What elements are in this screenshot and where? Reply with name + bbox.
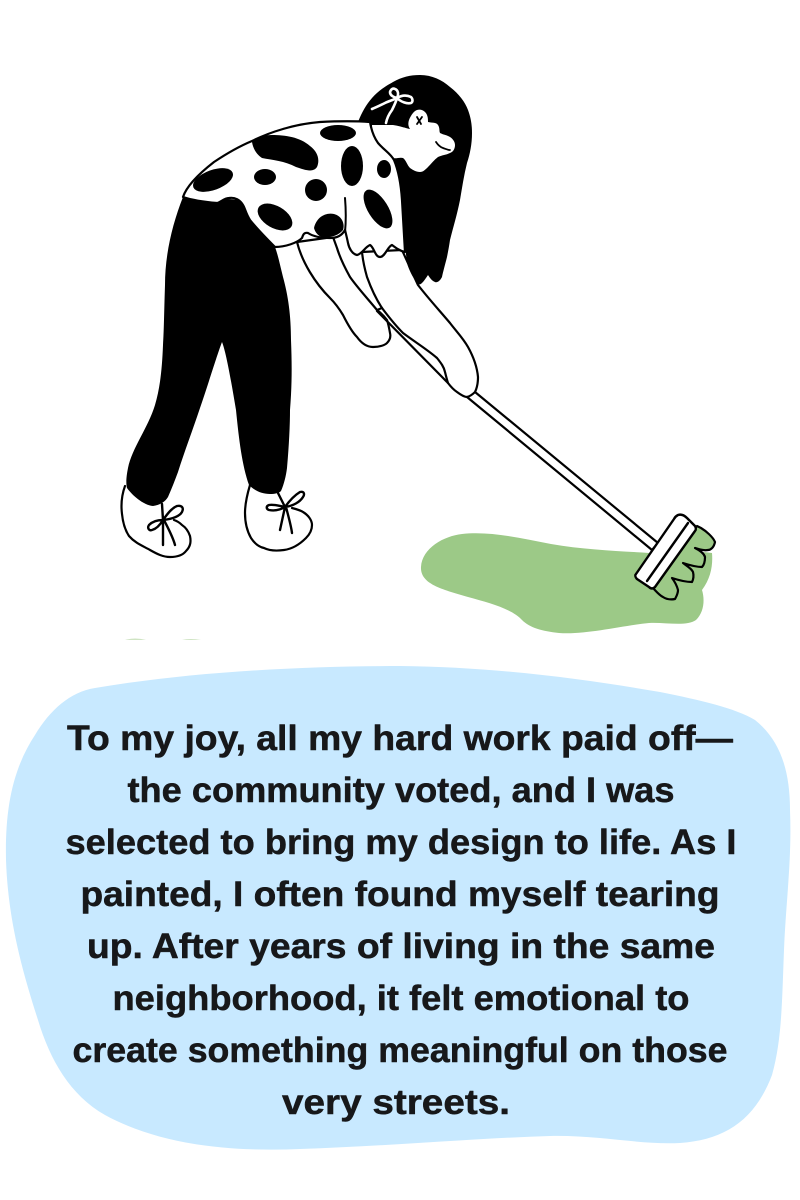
story text: neighborhood, it felt emotional to — [112, 979, 690, 1018]
story text: up. After years of living in the same — [87, 927, 715, 966]
pants — [126, 197, 292, 506]
story text: painted, I often found myself tearing — [80, 875, 720, 914]
broom bristles — [652, 526, 715, 599]
broom handle upper section — [377, 311, 448, 383]
face — [372, 110, 455, 172]
near arm and hand — [362, 250, 478, 397]
broom handle lower section — [467, 392, 658, 550]
right shoe with bow — [245, 485, 312, 551]
broom head stripe — [647, 523, 688, 581]
hair — [358, 75, 472, 284]
arm-to-handle connector — [377, 308, 382, 310]
story text: create something meaningful on those — [72, 1031, 728, 1070]
story text: selected to bring my design to life. As I — [66, 823, 736, 862]
ear mark — [417, 117, 422, 124]
left shoe with bow — [121, 486, 191, 557]
far arm and hand — [297, 237, 390, 347]
blouse — [183, 121, 405, 257]
smile — [436, 142, 450, 150]
illustration: person sweeping — [121, 75, 715, 599]
story text: To my joy, all my hard work paid off— — [67, 719, 733, 758]
story text: the community voted, and I was — [128, 771, 674, 810]
blouse fold — [344, 198, 347, 232]
green paint puddle — [421, 533, 712, 633]
story text — [66, 719, 736, 1122]
speech blob — [6, 666, 790, 1150]
faint green marks at image edge — [125, 638, 201, 640]
story text: very streets. — [282, 1083, 510, 1122]
blouse spots — [190, 125, 398, 237]
broom head — [635, 515, 696, 588]
hair bow — [372, 89, 412, 123]
